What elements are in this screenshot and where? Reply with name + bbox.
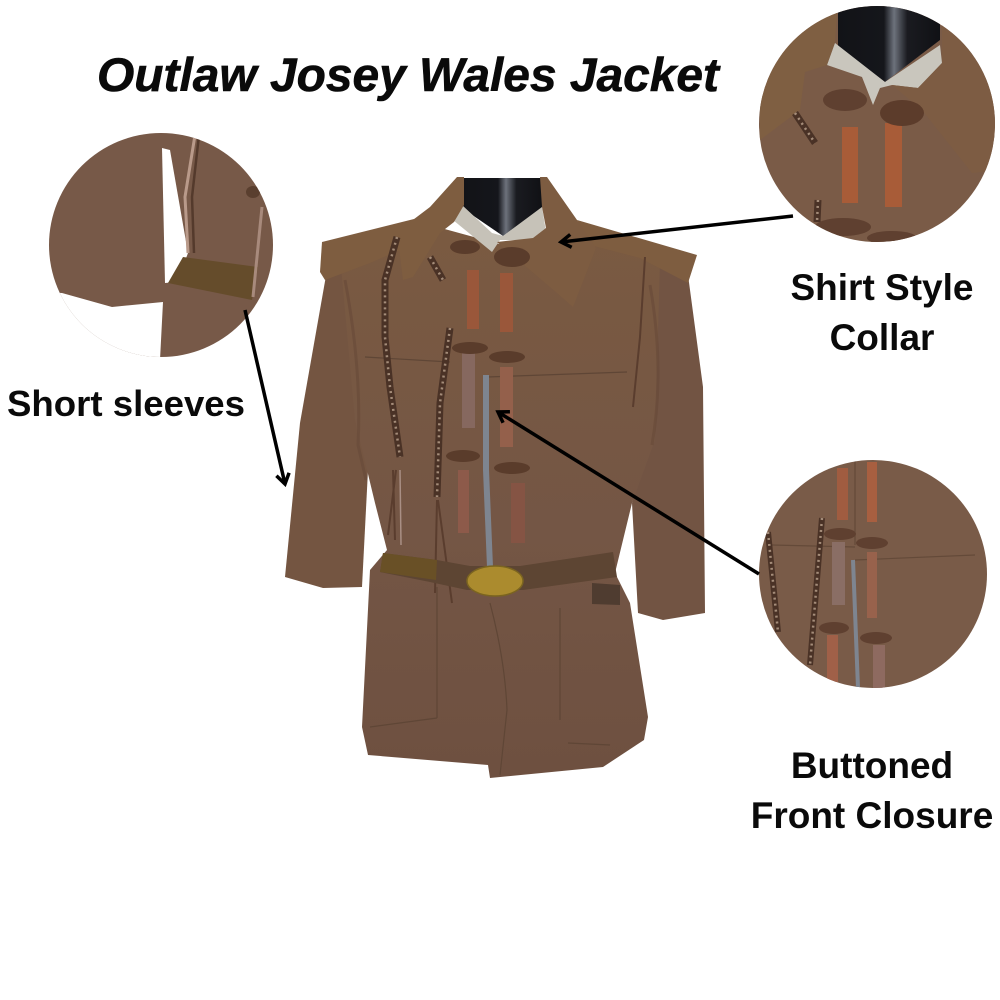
left sleeve [285,270,372,588]
placket grey strip [486,375,490,567]
mannequin neck [462,178,542,236]
belt [380,552,617,590]
shoulder flap right [577,220,697,283]
right armhole shade [650,285,658,445]
braided cords [385,237,645,603]
label: buttoned front closure: Buttoned [791,745,953,786]
title: Outlaw Josey Wales Jacket [97,48,721,101]
pocket opening [592,583,620,605]
label: buttoned front closure: Front Closure [751,795,993,836]
arrow: collar [561,216,793,242]
detail circle: sleeve [45,130,277,360]
shoulder flap left [320,215,430,280]
body [340,225,660,778]
arrow: closure [498,412,759,574]
jacket illustration [285,177,705,778]
belt buckle [467,566,523,596]
belt patch [380,553,437,580]
label: short sleeves: Short sleeves [7,383,245,424]
label: shirt style collar: Collar [830,317,934,358]
arrow: sleeve [245,310,285,484]
collar right [497,177,596,307]
leather tabs [458,270,525,543]
inner shirt [453,205,546,252]
collar left [397,177,464,280]
detail circle: closure [759,460,987,688]
left armhole shade [345,280,366,480]
toggle buttons [446,240,530,474]
seams [365,357,627,775]
detail circle: collar [759,6,1000,245]
label: shirt style collar: Shirt Style [790,267,974,308]
right sleeve [632,250,705,620]
